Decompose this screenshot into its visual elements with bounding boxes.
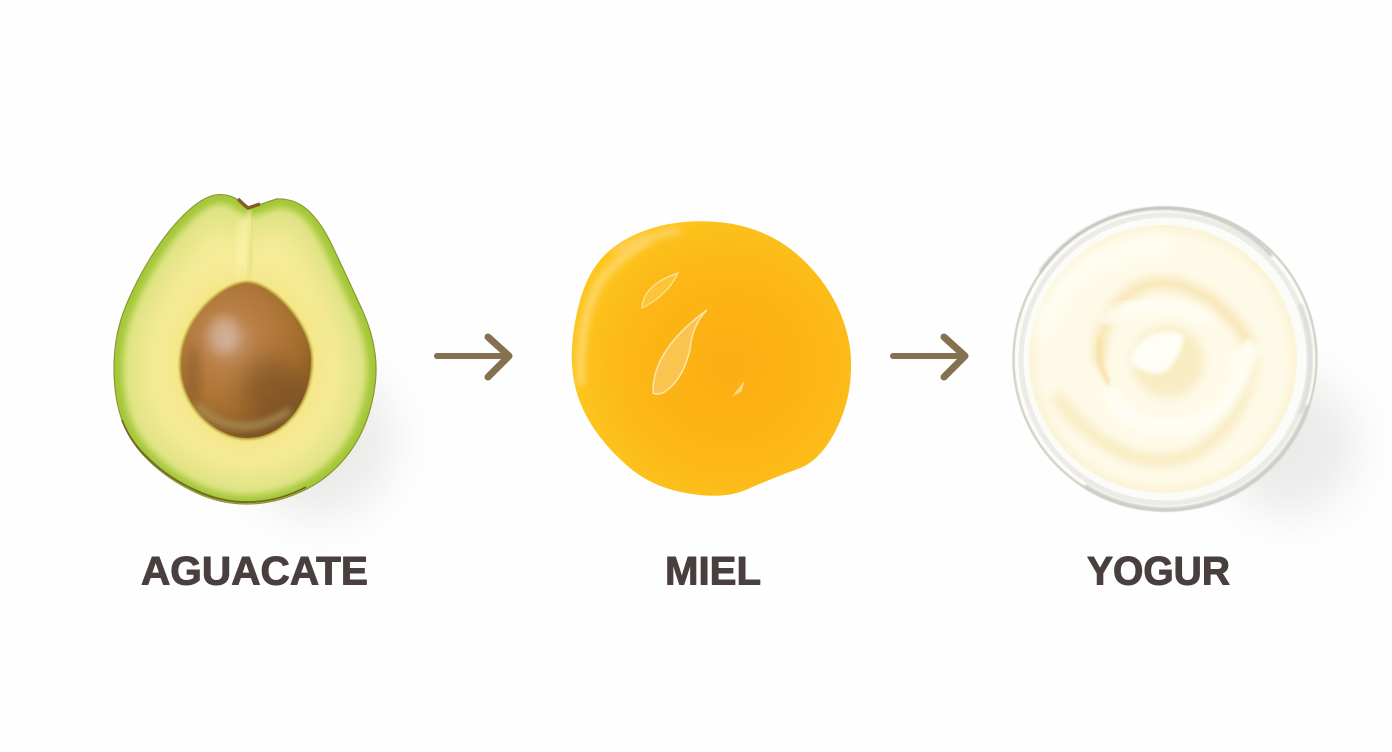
honey puddle [572,221,851,496]
ingredient: yogurt bowl [1012,206,1356,515]
arrow 1 [437,337,509,377]
yogurt centre peak [1132,326,1204,398]
label: MIEL: MIEL [665,550,761,594]
honey highlight: long [653,310,707,394]
arrow 2 [893,337,965,377]
label: AGUACATE: AGUACATE [141,550,368,594]
ingredient: honey [572,221,851,496]
glass bowl [1012,206,1318,512]
infographic: three ingredients sequence [113,194,1358,586]
yogurt [1029,225,1297,493]
bowl shadow [1224,375,1356,515]
honey edge gloss [581,240,650,385]
avocado skin edge [114,195,376,504]
yogurt swirl [1040,245,1254,461]
ingredient: avocado [114,195,394,518]
honey highlight: small [733,382,744,396]
label: YOGUR: YOGUR [1087,550,1230,594]
avocado seed [181,283,311,438]
avocado flesh [114,195,376,504]
honey highlight: upper [642,273,678,308]
avocado shadow [242,362,394,518]
